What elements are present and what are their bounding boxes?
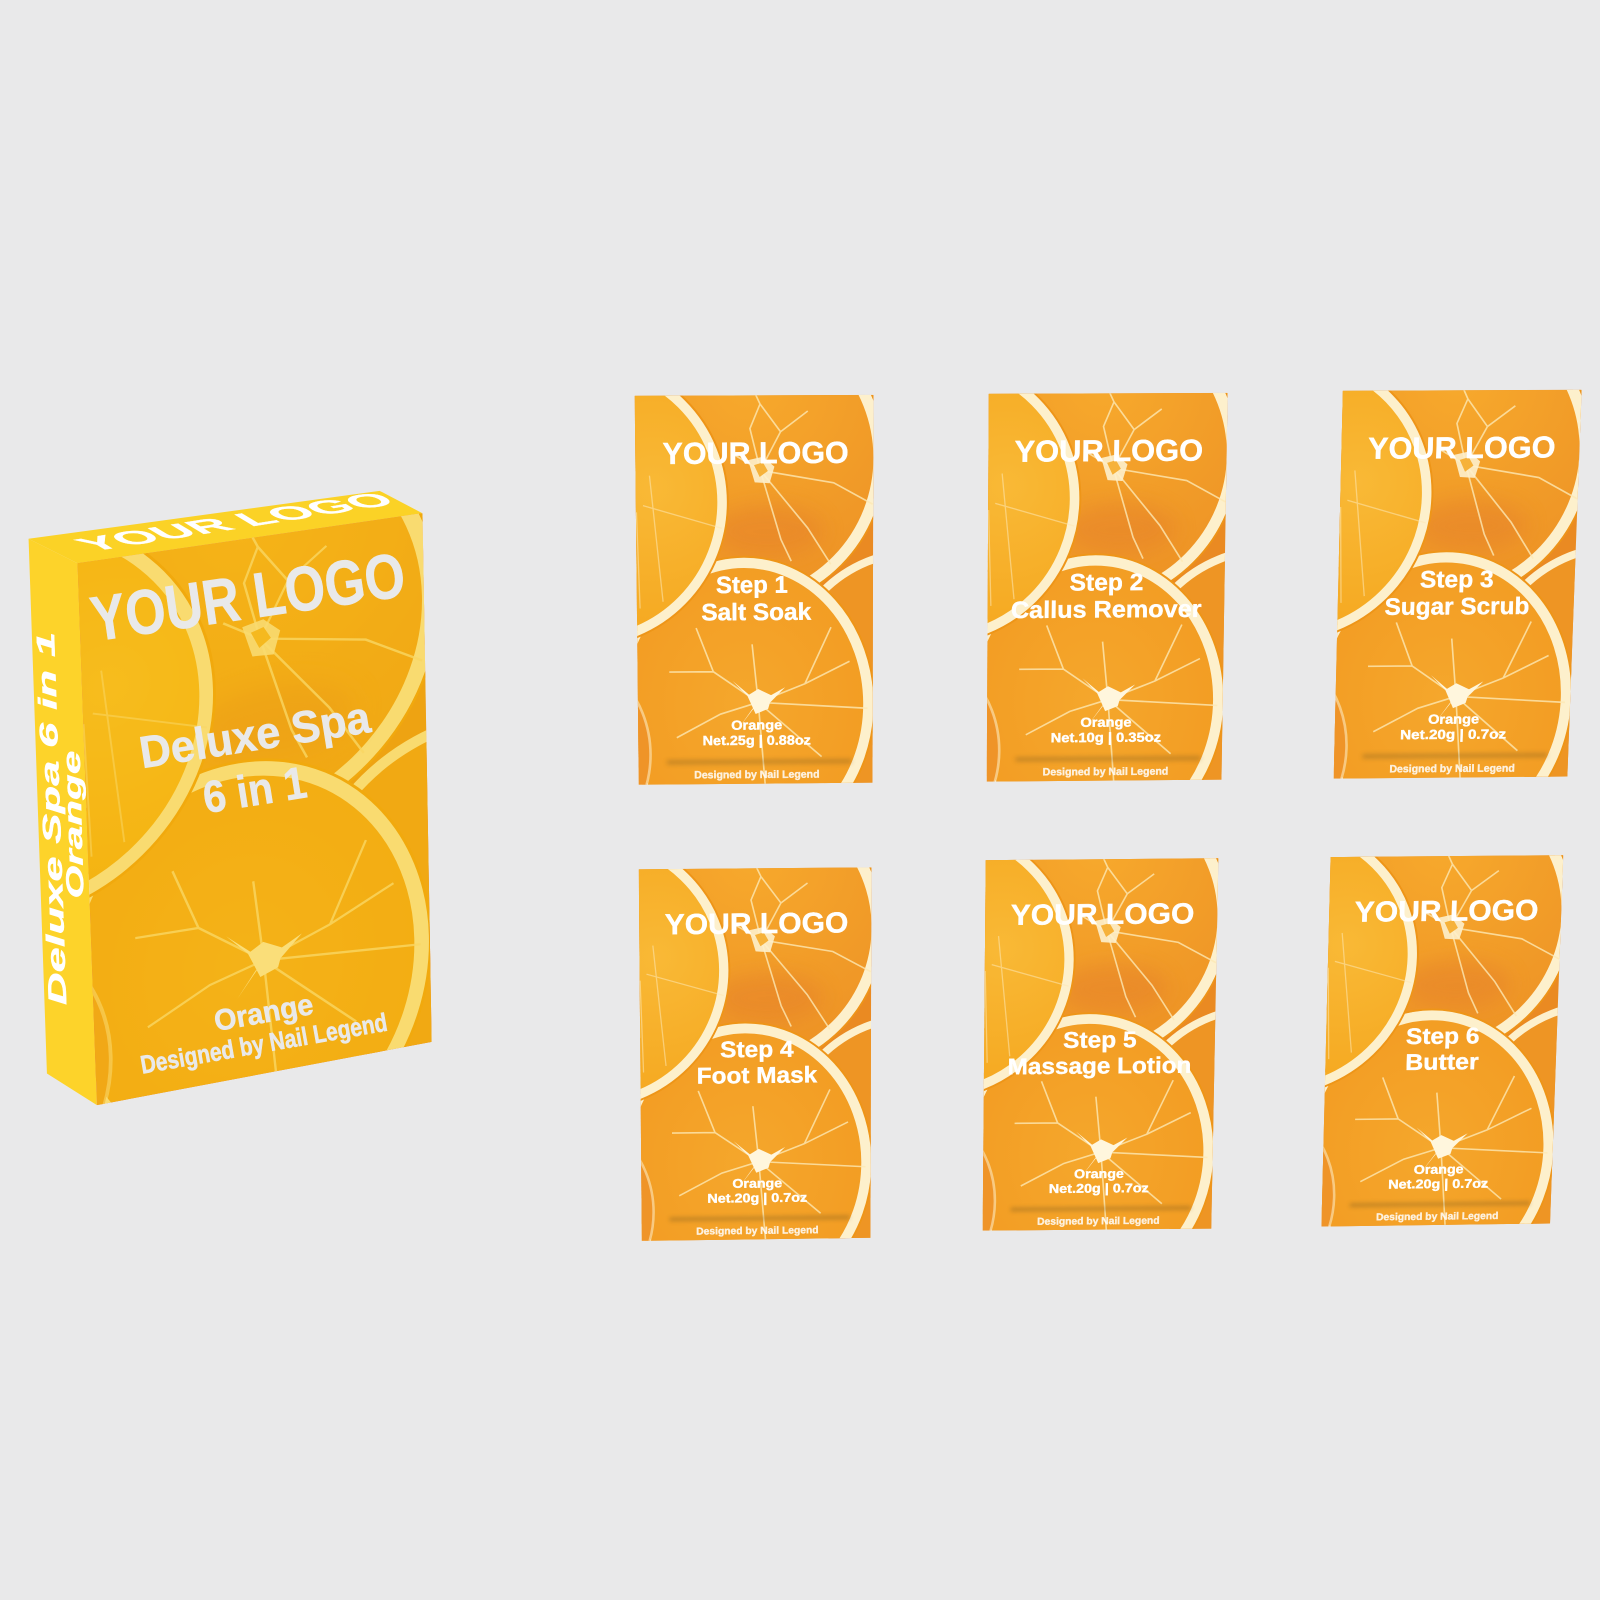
sachet text: Orange	[731, 717, 782, 733]
sachet text: Designed by Nail Legend	[1389, 763, 1515, 775]
sachet text: Net.20g | 0.7oz	[1049, 1180, 1149, 1196]
sachet text: Step 1	[716, 572, 788, 599]
sachet artwork	[1321, 855, 1564, 1226]
sachet text: Step 3	[1420, 566, 1494, 594]
box side variant: Orange	[59, 750, 90, 899]
sachet text: Orange	[1414, 1161, 1464, 1177]
box side title: Deluxe Spa 6 in 1	[32, 632, 72, 1006]
box product name line 1: Deluxe Spa	[136, 691, 375, 778]
sachet text: YOUR LOGO	[1368, 431, 1556, 466]
sachet artwork	[638, 867, 872, 1241]
sachet artwork	[986, 392, 1228, 782]
sachet text: Sugar Scrub	[1384, 593, 1530, 621]
sachet text: Net.10g | 0.35oz	[1051, 730, 1162, 745]
sachet text: Step 4	[720, 1036, 794, 1062]
sachet text: YOUR LOGO	[665, 906, 848, 941]
sachet text: Step 6	[1406, 1023, 1480, 1049]
sachet: step 1 salt soak	[634, 394, 874, 785]
sachet text: Orange	[1080, 715, 1132, 730]
sachet text: Foot Mask	[697, 1061, 817, 1089]
sachet text: Designed by Nail Legend	[696, 1225, 819, 1238]
sachet artwork	[982, 858, 1218, 1231]
sachet text	[1005, 897, 1195, 1228]
sachet text: Orange	[732, 1175, 782, 1191]
product box	[28, 490, 432, 1106]
sachet text: Callus Remover	[1011, 596, 1202, 624]
sachet text: Net.25g | 0.88oz	[703, 732, 811, 748]
sachet: step 4 foot mask	[638, 867, 872, 1241]
sachet text: Net.20g | 0.7oz	[707, 1190, 807, 1206]
sachet text: Designed by Nail Legend	[1037, 1216, 1160, 1228]
box variant name: Orange	[212, 988, 316, 1038]
box front logo: YOUR LOGO	[86, 540, 410, 655]
sachet text: Step 2	[1069, 569, 1144, 597]
box product name line 2: 6 in 1	[199, 756, 310, 823]
sachet: step 5 massage lotion	[982, 858, 1218, 1231]
sachet text	[1358, 431, 1556, 776]
sachet text: YOUR LOGO	[1354, 894, 1539, 929]
sachet text: Orange	[1074, 1166, 1124, 1181]
sachet text: YOUR LOGO	[1010, 897, 1195, 932]
box left side panel	[29, 539, 97, 1105]
sachet text: Massage Lotion	[1007, 1052, 1192, 1079]
sachet text	[1009, 434, 1203, 779]
sachet artwork	[634, 394, 874, 785]
box top panel	[29, 491, 422, 563]
sachet text: Butter	[1405, 1048, 1479, 1075]
sachet text: Step 5	[1063, 1026, 1137, 1053]
box designer credit: Designed by Nail Legend	[138, 1009, 389, 1080]
sachet text: Orange	[1428, 711, 1479, 727]
sachet text	[1345, 894, 1539, 1224]
sachet text: YOUR LOGO	[1014, 434, 1203, 469]
sachet text: Net.20g | 0.7oz	[1400, 726, 1507, 742]
sachet text: Net.20g | 0.7oz	[1388, 1176, 1488, 1192]
sachet artwork	[1334, 390, 1582, 779]
sachet text	[662, 436, 850, 782]
sachet text: Designed by Nail Legend	[1376, 1211, 1499, 1223]
sachet text: Salt Soak	[701, 599, 812, 626]
sachet text	[665, 906, 849, 1238]
sachet text: YOUR LOGO	[662, 436, 849, 471]
sachet: step 2 callus remover	[986, 392, 1228, 782]
sachet: step 3 sugar scrub	[1334, 390, 1582, 779]
box front artwork: orange slices	[78, 513, 432, 1106]
sachet text: Designed by Nail Legend	[694, 769, 820, 781]
sachet text: Designed by Nail Legend	[1043, 766, 1168, 778]
sachet: step 6 butter	[1321, 855, 1564, 1226]
box top logo: YOUR LOGO	[67, 489, 404, 555]
